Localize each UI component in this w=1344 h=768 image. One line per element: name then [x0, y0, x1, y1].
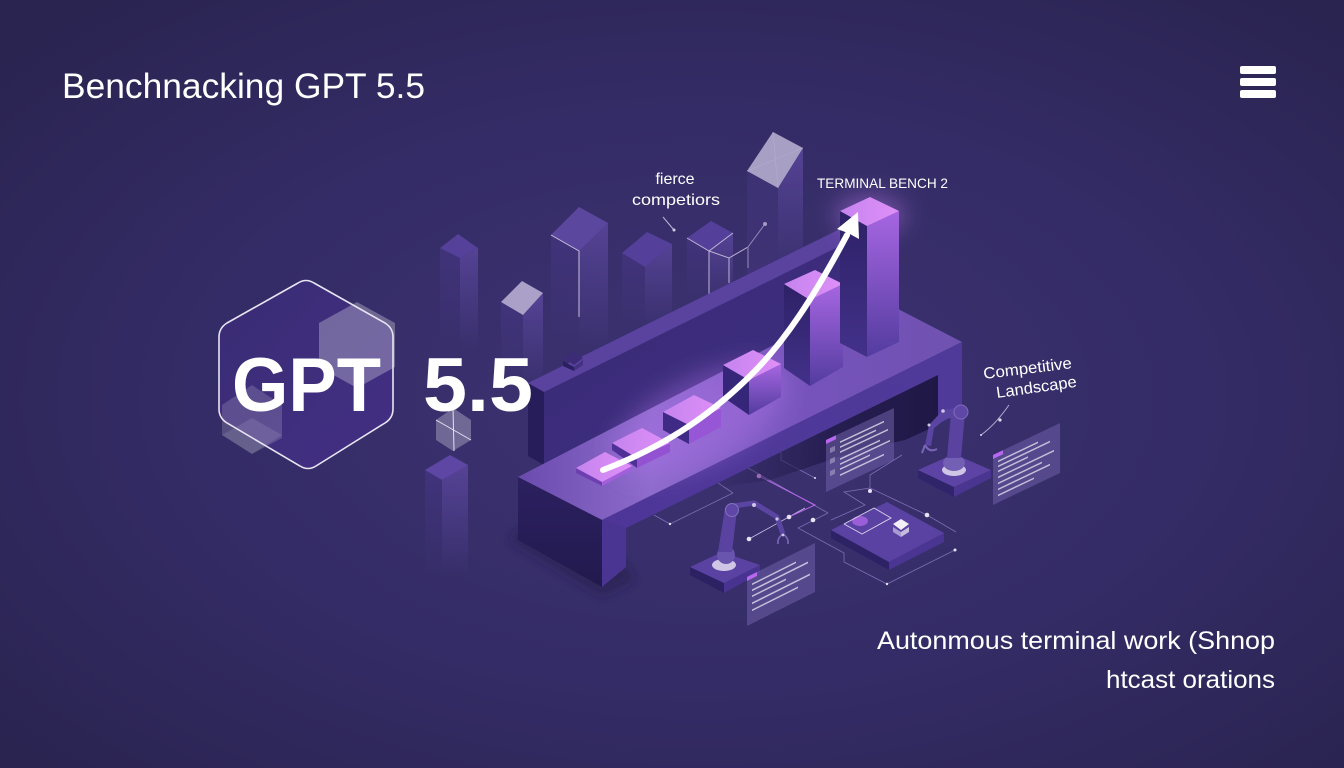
icon: small glass hexagon — [436, 408, 471, 451]
caption line 1: Autonmous terminal work (Shnop — [877, 627, 1275, 655]
competitor bar far left — [425, 455, 468, 575]
terminal panel center — [826, 408, 894, 492]
competitor bar with wire lines — [663, 217, 767, 300]
riser wall — [544, 245, 870, 465]
small cube — [563, 352, 583, 371]
title: Benchnacking GPT 5.5 — [62, 67, 425, 106]
glow behind bars — [596, 339, 804, 501]
circuit lines on floor — [654, 452, 956, 584]
benchmark platform — [518, 229, 962, 587]
hexagon badge — [219, 280, 395, 468]
icon: hamburger menu — [1240, 66, 1276, 98]
bar 2 — [612, 428, 670, 468]
terminal panel right — [993, 423, 1060, 505]
table top — [518, 290, 962, 520]
version label: 5.5 — [423, 343, 533, 428]
label: competitive landscape — [980, 355, 1078, 436]
platform — [690, 567, 724, 593]
robot arm — [922, 405, 968, 476]
label: competitive landscape: Competitive — [982, 355, 1073, 383]
arrow: rising trend — [603, 212, 859, 470]
white cube — [893, 519, 909, 537]
under-table shadow — [700, 372, 938, 490]
GPT label: GPT — [232, 343, 381, 428]
bar 3 — [663, 395, 721, 444]
label: fierce competitors — [632, 171, 720, 209]
label: competitive landscape: Landscape — [995, 374, 1078, 402]
bar chart rising — [576, 197, 899, 486]
beam front — [602, 342, 962, 528]
left leg side — [518, 477, 602, 587]
bar 1 — [576, 452, 632, 486]
label: terminal bench: TERMINAL BENCH 2 — [817, 175, 948, 191]
background competitor bars — [425, 132, 803, 575]
robot arm — [712, 503, 788, 571]
competitor bar small — [440, 234, 478, 350]
circuit nodes — [669, 474, 956, 585]
left leg front — [602, 520, 626, 587]
platform — [918, 470, 954, 497]
riser top strip — [528, 229, 846, 392]
bar 6 — [840, 197, 899, 357]
label: fierce competitors: competiors — [632, 192, 720, 209]
competitor bar with light cap — [501, 281, 543, 385]
decorative hexagon large — [319, 302, 395, 388]
label: fierce competitors: fierce — [655, 171, 695, 188]
competitor bar large light cap — [747, 132, 803, 285]
competitor bar tall — [551, 207, 608, 345]
competitor bar middle — [622, 232, 672, 325]
table shadow — [510, 530, 634, 596]
left robot station — [690, 503, 788, 593]
hexagon outline — [219, 280, 393, 468]
central chip platform — [831, 502, 944, 570]
right robot station — [918, 405, 991, 497]
bar 5 — [784, 270, 843, 386]
glow at tallest bar — [835, 195, 905, 235]
caption line 2: htcast orations — [1106, 666, 1275, 694]
decorative hexagon small — [222, 385, 282, 454]
bar 4 — [723, 350, 781, 415]
terminal panel left — [747, 543, 815, 626]
